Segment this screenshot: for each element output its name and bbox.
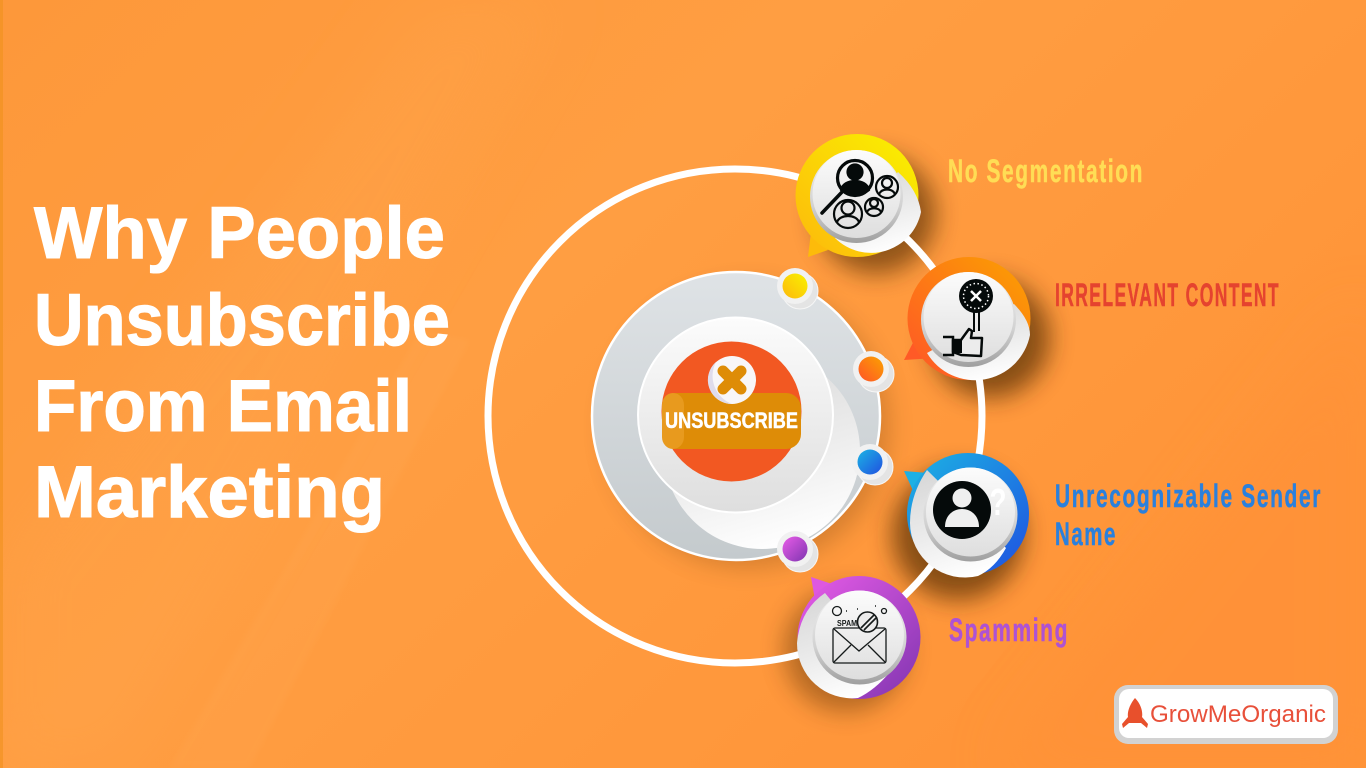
central unsubscribe disc <box>592 272 880 560</box>
title <box>34 193 450 533</box>
icon: rocket <box>1122 698 1148 728</box>
badge: no segmentation <box>796 134 921 257</box>
label: unrecognizable sender name <box>1055 478 1322 552</box>
connector dot: purple <box>777 531 818 572</box>
label: spamming: Spamming <box>949 612 1069 648</box>
badge: spamming <box>797 576 920 699</box>
connector dot: blue <box>852 444 893 485</box>
title: Unsubscribe <box>34 280 450 361</box>
badge: irrelevant content <box>904 257 1030 380</box>
logo: GrowMeOrganic: GrowMeOrganic <box>1150 701 1326 728</box>
unsubscribe icon: UNSUBSCRIBE <box>665 408 798 433</box>
connector dot: yellow <box>777 268 818 309</box>
offset white disc <box>664 353 860 549</box>
inner white disc <box>638 318 833 512</box>
title: Marketing <box>34 452 385 533</box>
label: no segmentation: No Segmentation <box>948 153 1144 189</box>
icon: magnifier and people <box>822 160 898 228</box>
icon: spam envelope: SPAM <box>837 619 857 628</box>
label: unrecognizable sender name: Name <box>1055 516 1117 552</box>
outer ring <box>488 169 982 663</box>
connector dot: orange <box>853 351 894 392</box>
unsubscribe icon <box>662 342 802 482</box>
title: From Email <box>34 366 412 447</box>
icon: thumbs up with cross sign <box>943 279 993 356</box>
badge: unrecognizable sender name <box>904 453 1029 578</box>
icon: anonymous user: ? <box>990 482 1006 524</box>
title: Why People <box>34 193 445 274</box>
logo: GrowMeOrganic <box>1114 685 1338 744</box>
badge shadows <box>606 154 1050 712</box>
